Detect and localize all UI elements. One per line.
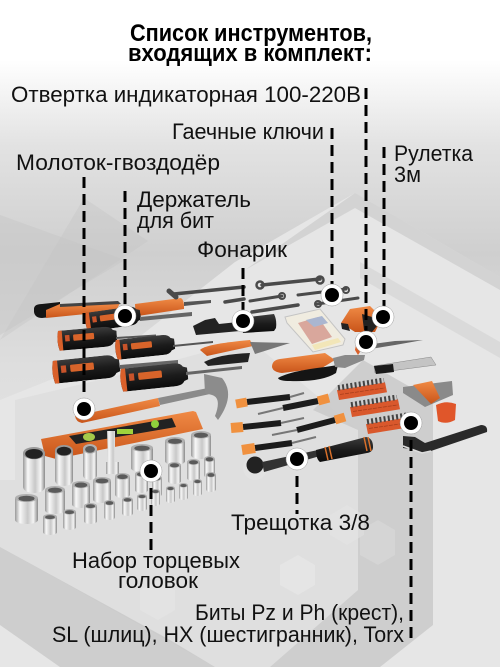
tool: orange screwdriver: [135, 298, 211, 316]
label: socket set: Набор торцевых: [72, 548, 240, 573]
label: flashlight: Фонарик: [197, 237, 287, 262]
label: socket set: головок: [118, 568, 198, 593]
tool: voltage tester: [355, 340, 423, 355]
label: socket set: [72, 548, 240, 593]
label: tape: Рулетка: [394, 141, 474, 166]
tool: ratchet: [243, 437, 373, 480]
tool: precision screwdrivers: [231, 393, 345, 450]
tool: flashlight: [193, 314, 276, 335]
label: bits: SL (шлиц), HX (шестигранник), Torx: [52, 622, 404, 647]
label: screwdriver tester: Отвертка индикаторная 100-220В: [11, 82, 361, 107]
tool: adjustable wrench: [403, 425, 487, 453]
title: [128, 20, 372, 67]
tool: bit holder: [84, 305, 192, 332]
label: hammer: Молоток-гвоздодёр: [16, 150, 220, 175]
tool: tape measure: [341, 306, 382, 332]
label: ratchet: Трещотка 3/8: [231, 510, 370, 535]
label: bit holder: Держатель: [137, 187, 251, 212]
label: bits: [52, 600, 404, 647]
markers: [73, 284, 422, 482]
label: bit holder: для бит: [137, 208, 214, 233]
tool: orange cup: [436, 402, 456, 423]
tool: spanners: [169, 276, 358, 312]
tool: utility knife: [34, 301, 121, 318]
label: tape: 3м: [394, 162, 421, 187]
tool: bit strips: [337, 380, 416, 434]
label: bit holder: [137, 187, 251, 233]
label: wrenches: Гаечные ключи: [172, 119, 324, 144]
tool: spirit level: [41, 411, 203, 459]
title: входящих в комплект:: [128, 40, 372, 67]
label: tape: [394, 141, 474, 187]
tool: socket set: [15, 431, 216, 535]
tool: bit box: [285, 309, 345, 352]
tool: large pliers: [272, 353, 365, 381]
leader lines: [84, 88, 411, 641]
tool: screwdriver set: [51, 326, 242, 392]
tool: hex keys: [403, 381, 453, 407]
tool: hammer: [75, 374, 228, 423]
tool: blade pack: [374, 357, 436, 374]
title: Список инструментов,: [130, 20, 372, 47]
label: bits: Биты Pz и Ph (крест),: [195, 600, 404, 625]
tool: small pliers: [200, 340, 290, 366]
